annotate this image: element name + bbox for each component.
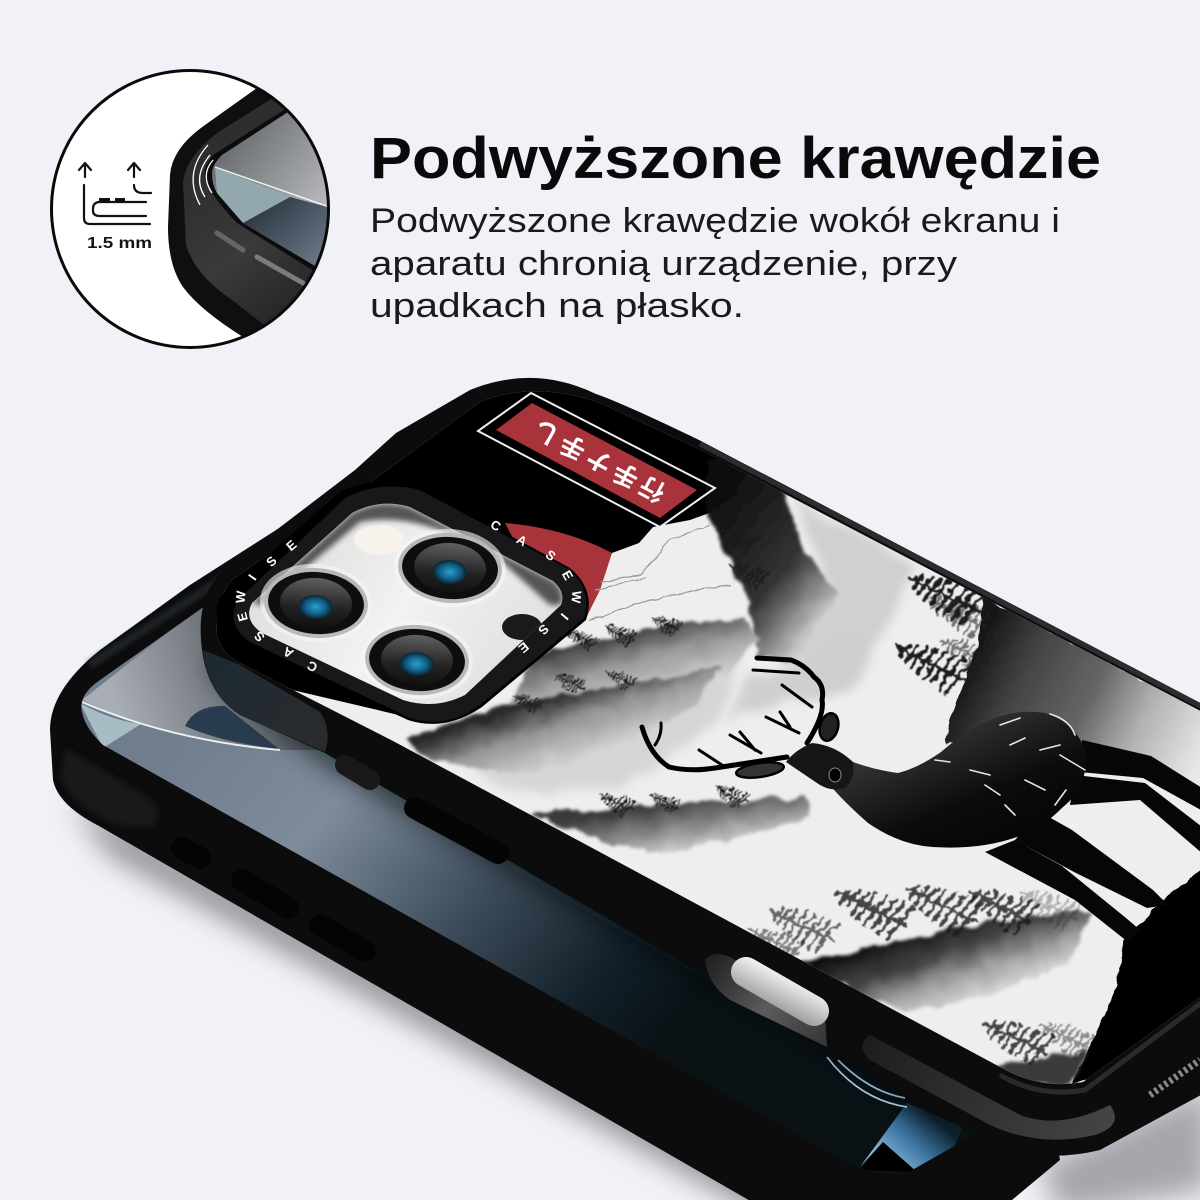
bumper frame (50, 400, 1060, 1200)
CASEWISE ring lettering: C (304, 657, 320, 675)
wallpaper upper wave (82, 608, 318, 750)
heading: Podwyższone krawędzie (370, 126, 1101, 191)
lens 2 (391, 525, 509, 611)
CASEWISE ring lettering: A (280, 643, 296, 661)
CASEWISE ring lettering: I (245, 572, 260, 583)
side button: action (182, 848, 200, 858)
CASEWISE ring lettering: E (234, 610, 251, 623)
stag hind legs (1070, 740, 1200, 860)
ring (234, 486, 586, 722)
CASEWISE ring lettering: S (263, 553, 280, 570)
bumper frame (201, 378, 1200, 1156)
body text: upadkach na płasko. (370, 287, 744, 325)
circle backdrop (52, 71, 328, 347)
corner bumper patch (60, 748, 159, 827)
top edge rim (700, 444, 1200, 711)
side patch near camera (203, 650, 328, 752)
label red plate (496, 403, 697, 518)
stag eye (829, 768, 841, 782)
rear label (478, 393, 715, 527)
lidar sensor (502, 614, 542, 640)
dark rock bottom right (1071, 860, 1200, 1085)
red sun (505, 523, 612, 620)
side button: volume down (320, 925, 365, 951)
hill under deer left (530, 797, 807, 855)
CASEWISE ring lettering: C (488, 517, 504, 535)
icon label: 1.5 mm (87, 235, 152, 252)
CASEWISE ring lettering: W (232, 590, 249, 604)
mist wash below peak (728, 497, 916, 725)
pine trees (513, 529, 1093, 1064)
bottom corner rim (1000, 1000, 1200, 1092)
mic slot (345, 765, 370, 780)
body text: Podwyższone krawędzie wokół ekranu i (370, 202, 1060, 240)
stag (642, 658, 1200, 942)
circle outline (52, 70, 328, 348)
inset circle: raised edge detail (50, 69, 330, 349)
stag front legs (985, 812, 1168, 942)
flash (354, 525, 404, 555)
lens 3 (358, 617, 476, 703)
corner bumper patch (862, 1035, 1115, 1140)
ink hill behind deer (946, 597, 1200, 790)
upper frame sheen (90, 485, 355, 665)
camera bump (217, 482, 589, 724)
stag head (786, 743, 854, 789)
CASEWISE ring lettering: E (559, 568, 576, 583)
CASEWISE ring lettering: S (543, 547, 559, 564)
left mountain ridge 1 (506, 616, 761, 707)
phone corner close-up (168, 88, 327, 336)
CASEWISE ring lettering: I (558, 610, 572, 623)
lens 1 (257, 560, 375, 646)
left mountain ridge 2 (405, 667, 722, 775)
ring base (217, 482, 589, 724)
CASEWISE ring lettering: E (515, 639, 532, 656)
label outline (478, 393, 715, 527)
pale paper mountains (590, 525, 730, 620)
cast shadows (70, 800, 1200, 1200)
wallpaper blue streaks (860, 1103, 963, 1170)
CASEWISE ring lettering (232, 517, 585, 675)
CASEWISE ring lettering: S (535, 621, 552, 638)
top phone: back side (200, 360, 1200, 1156)
stag flank marks (935, 714, 1085, 815)
silver side button (746, 972, 814, 1011)
paper (200, 370, 1200, 1100)
case artwork (200, 360, 1200, 1100)
stag ears (818, 712, 840, 742)
speaker grille (1150, 1060, 1200, 1095)
black sky (216, 391, 730, 715)
side button: volume up (242, 880, 288, 908)
camera window (249, 504, 562, 704)
bottom phone: screen side (50, 527, 1060, 1200)
CASEWISE ring lettering: W (568, 590, 585, 604)
label text: 行手ナ手し (525, 412, 670, 507)
window inner lip (252, 504, 562, 605)
CASEWISE ring lettering: S (251, 628, 268, 645)
shadow from upper phone (205, 650, 1000, 1125)
screen (81, 608, 974, 1174)
stag antlers (642, 658, 823, 770)
power button (415, 808, 498, 853)
body text: aparatu chronią urządzenie, przy (370, 245, 957, 283)
body text (370, 202, 1060, 325)
mist wash left (476, 665, 738, 796)
ink mountain peak (706, 450, 837, 665)
side button recess (705, 954, 827, 1047)
stag body (830, 712, 1086, 848)
lower hill (799, 910, 1094, 1012)
CASEWISE ring lettering: E (283, 537, 300, 554)
icon: raised edge diagram (79, 163, 151, 224)
CASEWISE ring lettering: A (514, 532, 530, 550)
